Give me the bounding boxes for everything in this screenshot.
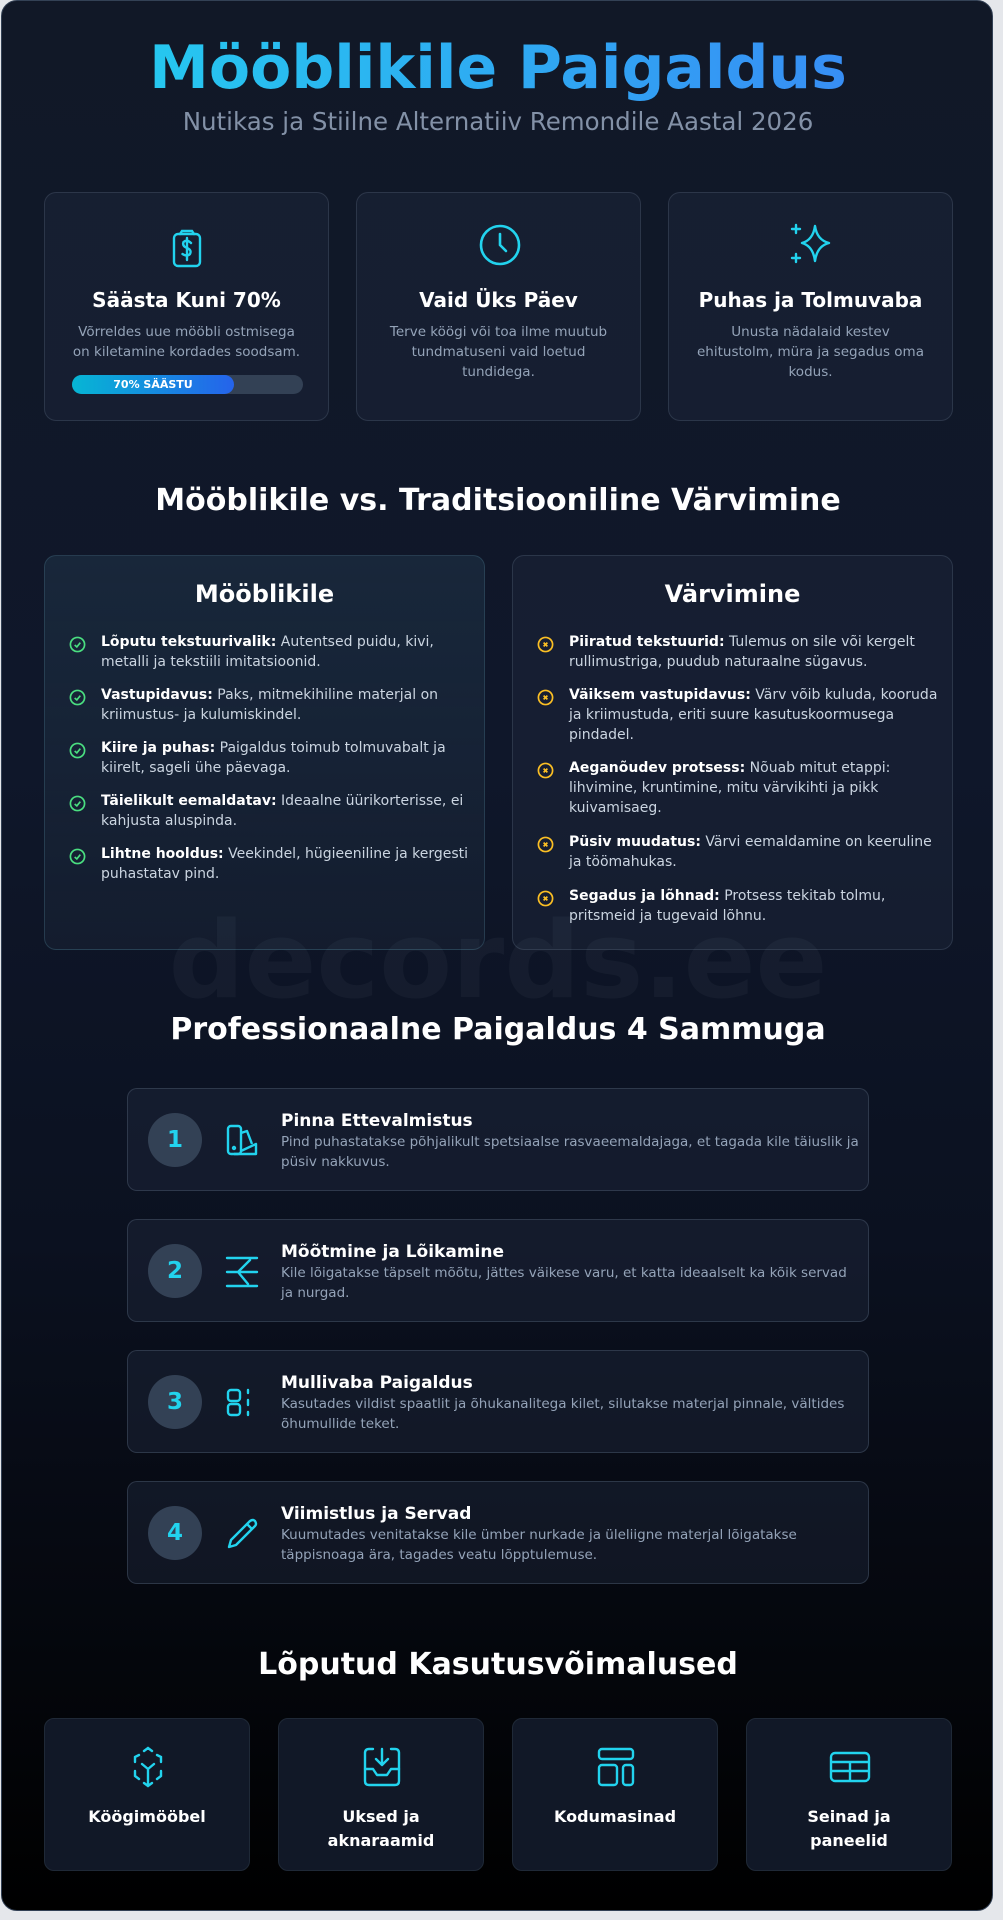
watermark: decords.ee	[169, 899, 827, 1022]
item list: Piiratud tekstuurid: Tulemus on sile või kergelt rullimustriga, puudub naturaalne sügavus.	[569, 634, 915, 670]
use: appliances: Kodumasinad	[554, 1807, 676, 1826]
step 1: 1	[167, 1127, 183, 1153]
item list: Kiire ja puhas: Paigaldus toimub tolmuvabalt ja kiirelt, sageli ühe päevaga.	[101, 740, 446, 776]
text: ehitustolm, müra ja segadus oma	[697, 344, 924, 360]
use: doors	[278, 1718, 484, 1871]
icon: swatch	[226, 1124, 258, 1156]
step 2	[127, 1219, 869, 1322]
step 1	[127, 1088, 869, 1191]
text: tundmatuseni vaid loetud	[412, 344, 585, 360]
item list: Aeganõudev protsess: Nõuab mitut etappi: lihvimine, kruntimine, mitu värvikihti ja pikk kuivamisaeg.	[569, 760, 890, 816]
card: one day	[356, 192, 641, 421]
step 3: Kasutades vildist spaatlit ja õhukanalitega kilet, silutakse materjal pinnale, vältides	[281, 1396, 844, 1412]
section heading: uses: Lõputud Kasutusvõimalused	[258, 1647, 738, 1682]
step 3	[127, 1350, 869, 1453]
card: clean	[668, 192, 953, 421]
item list: Täielikult eemaldatav: Ideaalne üürikorterisse, ei kahjusta aluspinda.	[101, 793, 463, 829]
icon: cut	[226, 1256, 258, 1288]
icon: pencil	[228, 1518, 258, 1548]
item list: Lõputu tekstuurivalik: Autentsed puidu, kivi, metalli ja tekstiili imitatsioonid.	[101, 634, 434, 670]
step 3: õhumullide teket.	[281, 1416, 399, 1432]
card: savings	[44, 192, 329, 421]
subtitle: Nutikas ja Stiilne Alternatiiv Remondile Aastal 2026	[183, 107, 813, 136]
text: kodus.	[788, 364, 833, 380]
text	[73, 324, 300, 360]
use: doors: aknaraamid	[328, 1831, 434, 1850]
icon: clock	[480, 224, 520, 266]
step 4: Viimistlus ja Servad	[281, 1504, 471, 1524]
use: kitchen	[44, 1718, 250, 1871]
step 2: Mõõtmine ja Lõikamine	[281, 1242, 504, 1262]
step 1: püsiv nakkuvus.	[281, 1154, 390, 1170]
icon: money	[172, 230, 202, 268]
use: walls: Seinad ja	[807, 1807, 891, 1826]
step 3: 3	[167, 1389, 183, 1415]
text: Unusta nädalaid kestev	[731, 324, 890, 340]
item list: Püsiv muudatus: Värvi eemaldamine on keeruline ja töömahukas.	[569, 834, 932, 870]
step 2: ja nurgad.	[281, 1285, 349, 1301]
step 4: Kuumutades venitatakse kile ümber nurkade ja üleliigne materjal lõigatakse	[281, 1527, 797, 1543]
text: Terve köögi või toa ilme muutub	[390, 324, 607, 340]
use: walls	[746, 1718, 952, 1871]
step 4	[127, 1481, 869, 1584]
step 2: 2	[167, 1258, 183, 1284]
step 1: Pinna Ettevalmistus	[281, 1111, 473, 1131]
panel: Mööblikile	[44, 555, 485, 950]
item list: Vastupidavus: Paks, mitmekihiline materjal on kriimustus- ja kulumiskindel.	[101, 687, 438, 723]
text	[390, 324, 607, 380]
step 4: 4	[167, 1520, 183, 1546]
use: walls: paneelid	[810, 1831, 888, 1850]
heading: Vaid Üks Päev	[419, 288, 578, 312]
section heading: comparison: Mööblikile vs. Traditsiooniline Värvimine	[155, 483, 841, 518]
item list	[538, 634, 937, 924]
text: on kiletamine kordades soodsam.	[73, 344, 300, 360]
use: kitchen: Köögimööbel	[88, 1807, 206, 1826]
item list	[70, 634, 468, 882]
heading: Säästa Kuni 70%	[92, 288, 281, 312]
panel title: Mööblikile	[195, 580, 334, 608]
item list: Lihtne hooldus: Veekindel, hügieeniline ja kergesti puhastatav pind.	[101, 846, 468, 882]
icon: layout	[226, 1388, 250, 1416]
step 2: Kile lõigatakse täpselt mõõtu, jättes väikese varu, et katta ideaalselt ka kõik servad	[281, 1265, 847, 1281]
heading: Puhas ja Tolmuvaba	[699, 288, 922, 312]
step 4: täppisnoaga ära, tagades veatu lõpptulemuse.	[281, 1547, 597, 1563]
item list: Väiksem vastupidavus: Värv võib kuluda, kooruda ja kriimustuda, eriti suure kasutuskoormusega pindadel.	[569, 687, 937, 743]
use: appliances	[512, 1718, 718, 1871]
step 3: Mullivaba Paigaldus	[281, 1373, 473, 1393]
text	[697, 324, 924, 380]
progress bar: 70% SÄÄSTU	[113, 378, 193, 391]
panel title: Värvimine	[665, 580, 800, 608]
text: Võrreldes uue mööbli ostmisega	[78, 324, 295, 340]
section heading: steps: Professionaalne Paigaldus 4 Sammuga	[170, 1012, 826, 1047]
item list: Segadus ja lõhnad: Protsess tekitab tolmu, pritsmeid ja tugevaid lõhnu.	[569, 888, 885, 924]
progress bar	[72, 375, 303, 394]
text: tundidega.	[462, 364, 535, 380]
icon: sparkles	[790, 224, 830, 264]
panel: Värvimine	[512, 555, 953, 950]
use: doors: Uksed ja	[342, 1807, 420, 1826]
step 1: Pind puhastatakse põhjalikult spetsiaalse rasvaeemaldajaga, et tagada kile täiuslik ja	[281, 1134, 859, 1150]
title: Mööblikile Paigaldus	[149, 33, 847, 103]
